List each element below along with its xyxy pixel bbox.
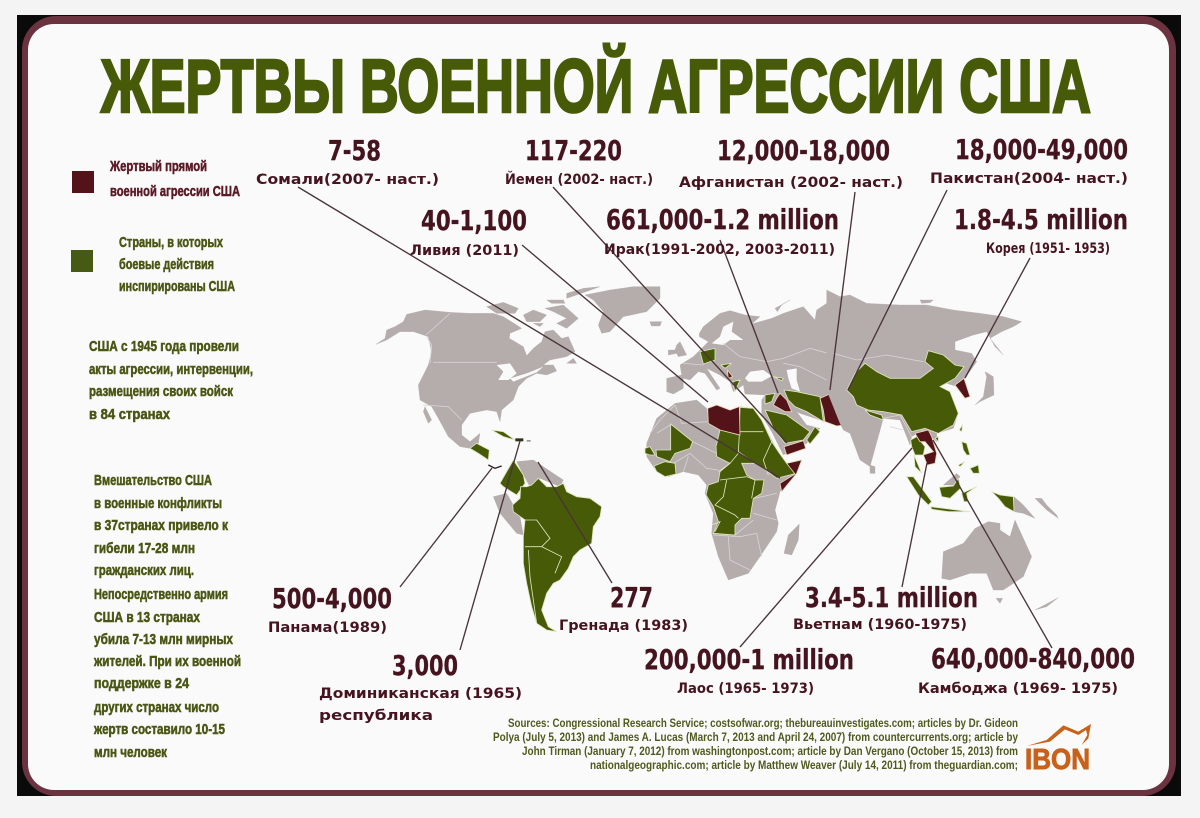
label: Dominican Republic: Доминиканская (1965) [319, 686, 522, 702]
label: Cambodia: 640,000-840,000 [931, 642, 1135, 675]
text block: casualties summary: гражданских лиц. [94, 562, 194, 579]
legend: inspired conflicts: боевые действия [119, 256, 214, 273]
legend: inspired conflicts: Страны, в которых [119, 234, 223, 251]
label: Vietnam: Вьетнам (1960-1975) [793, 617, 967, 633]
sources [493, 718, 1019, 772]
text block: casualties summary: в военные конфликты [94, 495, 222, 512]
label: Pakistan [930, 133, 1128, 187]
label: Afghanistan: 12,000-18,000 [717, 134, 890, 167]
label: Somalia: 7-58 [328, 134, 381, 167]
label: Korea: Корея (1951- 1953) [986, 241, 1110, 257]
text block: casualties summary: гибели 17-28 млн [94, 540, 195, 557]
label: Vietnam [793, 581, 978, 633]
text block: interventions in 84 countries: размещения своих войск [89, 383, 233, 400]
label: Dominican Republic [319, 649, 522, 724]
map: Southeast Asia and Oceania [870, 442, 1058, 610]
text block: interventions in 84 countries: в 84 странах [89, 406, 171, 423]
text block: casualties summary: жителей. При их военной [93, 653, 241, 670]
map: East Asia [827, 290, 1022, 473]
text block: casualties summary: других странах число [94, 699, 219, 716]
label: Panama: Панама(1989) [268, 620, 387, 636]
legend: direct victims: военной агрессии США [110, 183, 240, 200]
label: Afghanistan: Афганистан (2002- наст.) [679, 175, 903, 191]
world map [376, 287, 1058, 632]
sources: John Tirman (January 7, 2012) from washingtonpost.com; article by Dan Vergano (October 15, 2013) from [522, 746, 1018, 758]
legend: direct victims [72, 158, 240, 200]
legend: inspired conflicts: инспирированы США [119, 278, 235, 295]
label: Yemen [505, 134, 653, 188]
label: Iraq: Ирак(1991-2002, 2003-2011) [604, 242, 835, 258]
label: Panama [268, 582, 392, 636]
label: Laos [644, 643, 854, 697]
text block: casualties summary: убила 7-13 млн мирных [94, 631, 234, 648]
text block: casualties summary: Вмешательство США [94, 472, 212, 489]
leader lines [298, 187, 1052, 650]
label: Pakistan: Пакистан(2004- наст.) [930, 171, 1128, 187]
label: Libya: Ливия (2011) [410, 243, 519, 259]
label: Grenada: 277 [610, 581, 653, 614]
logo: IBON [1025, 724, 1091, 776]
text block: casualties summary: США в 13 странах [94, 609, 201, 626]
label: Korea: 1.8-4.5 million [954, 203, 1128, 236]
map: Africa [645, 400, 806, 580]
label: Yemen: Йемен (2002- наст.) [505, 171, 653, 188]
text block: casualties summary: жертв составило 10-15 [93, 721, 225, 738]
logo: IBON: IBON [1025, 744, 1090, 776]
text block: casualties summary: Непосредственно армия [94, 586, 228, 603]
label: Grenada [559, 581, 688, 634]
sources: Sources: Congressional Research Service; costsofwar.org; thebureauinvestigates.com; articles by Dr. Gideon [508, 718, 1018, 730]
label: Dominican Republic: 3,000 [392, 649, 458, 682]
label: Yemen: 117-220 [525, 134, 622, 167]
label: Somalia [256, 134, 439, 188]
text block: casualties summary: поддержке в 24 [94, 675, 190, 692]
label: Iraq [604, 203, 839, 258]
sources: nationalgeographic.com; article by Matthew Weaver (July 14, 2011) from theguardian.com; [590, 760, 1018, 772]
map: Panama and Dominican markers [488, 438, 531, 468]
label: Libya [410, 204, 527, 259]
text block: interventions in 84 countries [89, 338, 253, 423]
label: Libya: 40-1,100 [421, 204, 527, 237]
label: Laos: Лаос (1965- 1973) [677, 681, 814, 697]
label: Afghanistan [679, 134, 903, 191]
label: Iraq: 661,000-1.2 million [606, 203, 839, 236]
sources: Polya (July 5, 2013) and James A. Lucas (March 7, 2013 and April 24, 2007) from countercurrents.org; article by [493, 732, 1019, 744]
text block: casualties summary: в 37странах привело к [94, 517, 228, 534]
label: Cambodia: Камбоджа (1969- 1975) [918, 681, 1118, 697]
label: Grenada: Гренада (1983) [559, 618, 688, 634]
label: Somalia: Сомали(2007- наст.) [256, 172, 439, 188]
label: Panama: 500-4,000 [272, 582, 392, 615]
map: North America [376, 287, 660, 448]
label: Dominican Republic: республика [319, 708, 433, 724]
label: Korea [954, 203, 1128, 257]
legend: direct victims: Жертвый прямой [109, 158, 207, 175]
legend: inspired conflicts [71, 234, 235, 295]
map: Europe and Middle East [650, 300, 860, 455]
label: Laos: 200,000-1 million [644, 643, 854, 676]
label: Pakistan: 18,000-49,000 [955, 133, 1128, 166]
map: Central and South America [470, 430, 602, 632]
text block: casualties summary: млн человек [94, 744, 167, 761]
label: Cambodia [918, 642, 1135, 697]
text block: interventions in 84 countries: акты агрессии, интервенции, [89, 361, 253, 378]
label: Vietnam: 3.4-5.1 million [805, 581, 978, 614]
text block: casualties summary [93, 472, 241, 761]
text block: interventions in 84 countries: США с 1945 года провели [89, 338, 239, 355]
